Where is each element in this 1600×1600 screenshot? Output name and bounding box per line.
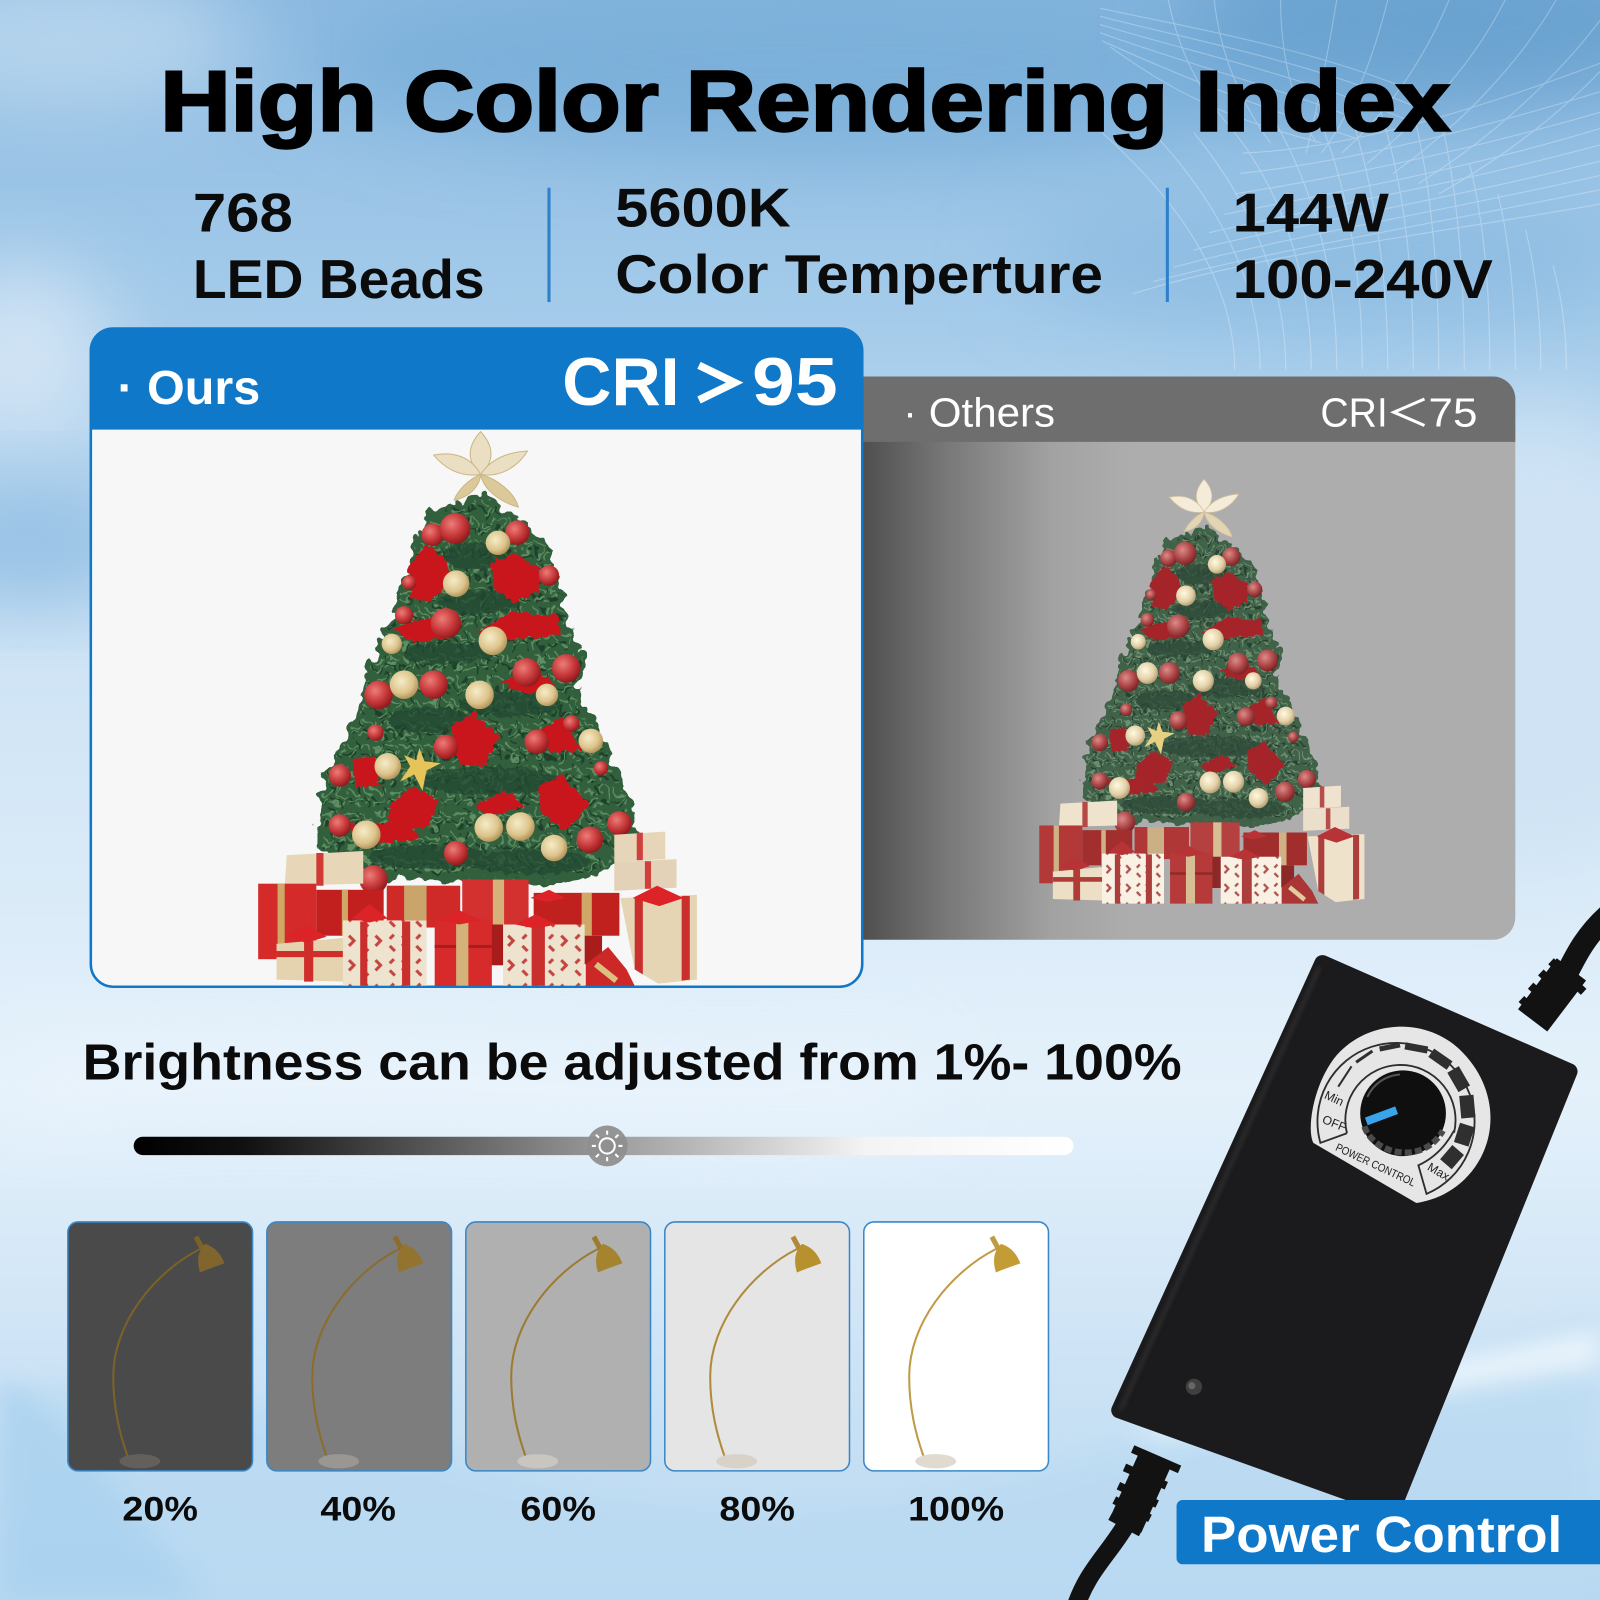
stat: power and voltage — [1233, 182, 1493, 310]
title: High Color Rendering Index — [160, 54, 1450, 150]
stat: LED beads — [193, 182, 485, 310]
stat: colour temperature: Color Temperture — [615, 243, 1103, 305]
dial plate — [1311, 1027, 1490, 1203]
indicator LED — [1186, 1379, 1202, 1395]
stat: LED beads: 768 — [193, 182, 293, 244]
ours CRI value: CRI — [562, 345, 680, 420]
power control device — [1074, 913, 1600, 1600]
others CRI value: 75 — [1429, 390, 1478, 436]
percentage labels — [122, 1490, 1004, 1528]
ours header bar — [90, 328, 863, 430]
top cable — [1521, 913, 1600, 1022]
power control badge: Power Control — [1201, 1506, 1562, 1563]
stat: colour temperature: 5600K — [615, 177, 791, 239]
brightness heading: Brightness can be adjusted from 1%- 100% — [83, 1034, 1182, 1091]
icon: sun knob — [587, 1126, 628, 1166]
percentage labels: 80% — [719, 1490, 795, 1528]
percentage labels: 20% — [122, 1490, 198, 1528]
others CRI value: CRI — [1320, 390, 1388, 436]
panel: others — [847, 377, 1515, 940]
device body — [1119, 963, 1569, 1508]
panel: ours — [90, 328, 863, 987]
bottom cable — [1074, 1449, 1180, 1600]
lamp card 60% — [466, 1222, 651, 1471]
dial printed labels: OFF — [1320, 1112, 1348, 1134]
others CRI value — [1320, 390, 1478, 436]
dial pointer — [1366, 1110, 1397, 1121]
others christmas tree — [1039, 479, 1364, 904]
others label: · Others — [903, 390, 1055, 436]
stat: colour temperature — [615, 177, 1103, 305]
ours CRI value — [562, 345, 838, 420]
percentage labels: 60% — [520, 1490, 596, 1528]
others header bar — [847, 377, 1515, 442]
stat: power and voltage: 144W — [1233, 182, 1389, 244]
dial printed labels: POWER CONTROL — [1333, 1142, 1417, 1189]
ours label: · Ours — [117, 362, 260, 415]
stat: power and voltage: 100-240V — [1233, 248, 1493, 310]
lamp card 100% — [864, 1222, 1048, 1471]
lamp card 40% — [267, 1222, 452, 1471]
dial printed labels — [1320, 1088, 1452, 1189]
lamp card 80% — [665, 1222, 849, 1471]
dial printed labels: Max — [1425, 1160, 1452, 1184]
dial printed labels: Min — [1322, 1088, 1346, 1109]
stat: LED beads: LED Beads — [193, 248, 485, 310]
ours CRI value: 95 — [752, 345, 838, 420]
dial knob — [1360, 1070, 1446, 1156]
ours christmas tree — [258, 432, 697, 986]
percentage labels: 40% — [320, 1490, 396, 1528]
lamp card 20% — [68, 1222, 253, 1471]
percentage labels: 100% — [908, 1490, 1004, 1528]
brightness slider — [134, 1126, 1073, 1166]
